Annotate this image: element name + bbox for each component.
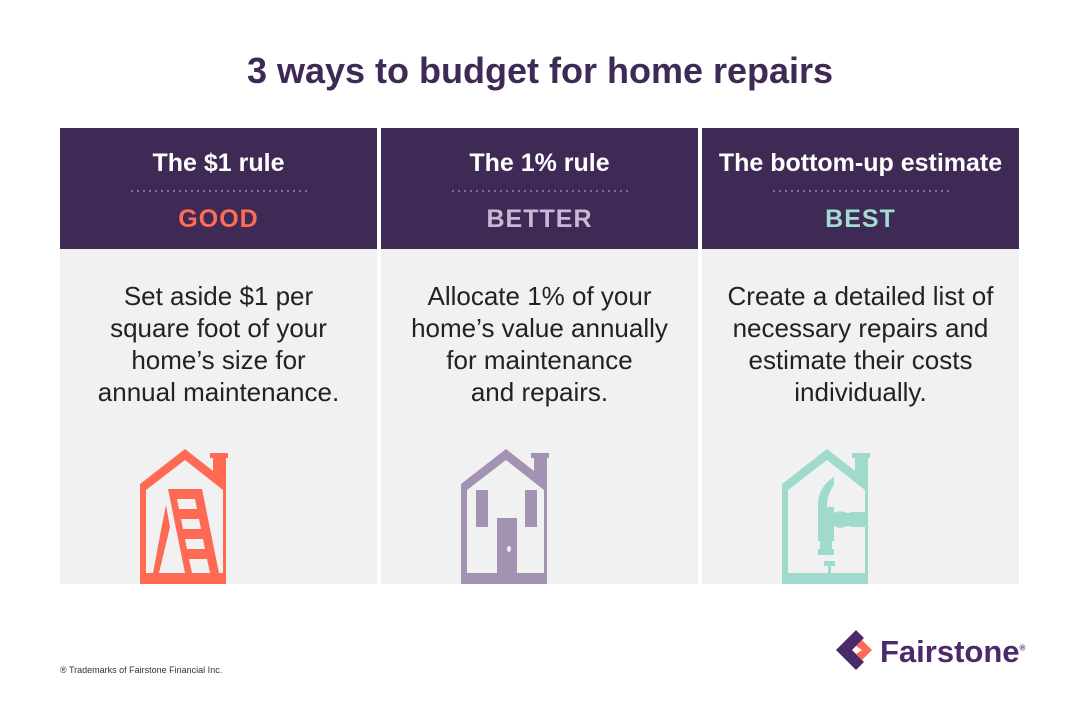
- icon: house with hammer: [782, 449, 870, 584]
- panel: $1 rule: GOOD: [178, 205, 259, 233]
- panel: bottom-up estimate: individually.: [794, 377, 927, 407]
- panel: bottom-up estimate: necessary repairs and: [733, 313, 988, 343]
- panel: 1% rule: BETTER: [486, 205, 592, 233]
- panel: $1 rule: annual maintenance.: [98, 377, 339, 407]
- title: 3 ways to budget for home repairs: [247, 50, 833, 91]
- panel: bottom-up estimate: Create a detailed list of: [728, 281, 993, 311]
- panel: bottom-up estimate: The bottom-up estimate: [719, 149, 1002, 177]
- panel: 1% rule: home’s value annually: [411, 313, 668, 343]
- icon: house with door and windows: [461, 449, 549, 584]
- panel: $1 rule: The $1 rule: [152, 149, 284, 177]
- icon: house with ladder: [140, 449, 228, 584]
- panel: 1% rule: for maintenance: [446, 345, 633, 375]
- panel: 1% rule: The 1% rule: [469, 149, 610, 177]
- panel: bottom-up estimate: estimate their costs: [748, 345, 972, 375]
- footnote: ® Trademarks of Fairstone Financial Inc.: [60, 665, 222, 675]
- panel: $1 rule: square foot of your: [110, 313, 327, 343]
- panel: $1 rule: Set aside $1 per: [124, 281, 313, 311]
- panel: 1% rule: and repairs.: [471, 377, 608, 407]
- panel: 1% rule: [381, 128, 698, 584]
- panel: bottom-up estimate: [702, 128, 1019, 584]
- panel: 1% rule: Allocate 1% of your: [427, 281, 652, 311]
- panel: $1 rule: home’s size for: [131, 345, 306, 375]
- panel: bottom-up estimate: BEST: [825, 205, 896, 233]
- panel: $1 rule: [60, 128, 377, 584]
- logo: Fairstone: Fairstone®: [880, 634, 1025, 669]
- logo: Fairstone: [836, 630, 1026, 670]
